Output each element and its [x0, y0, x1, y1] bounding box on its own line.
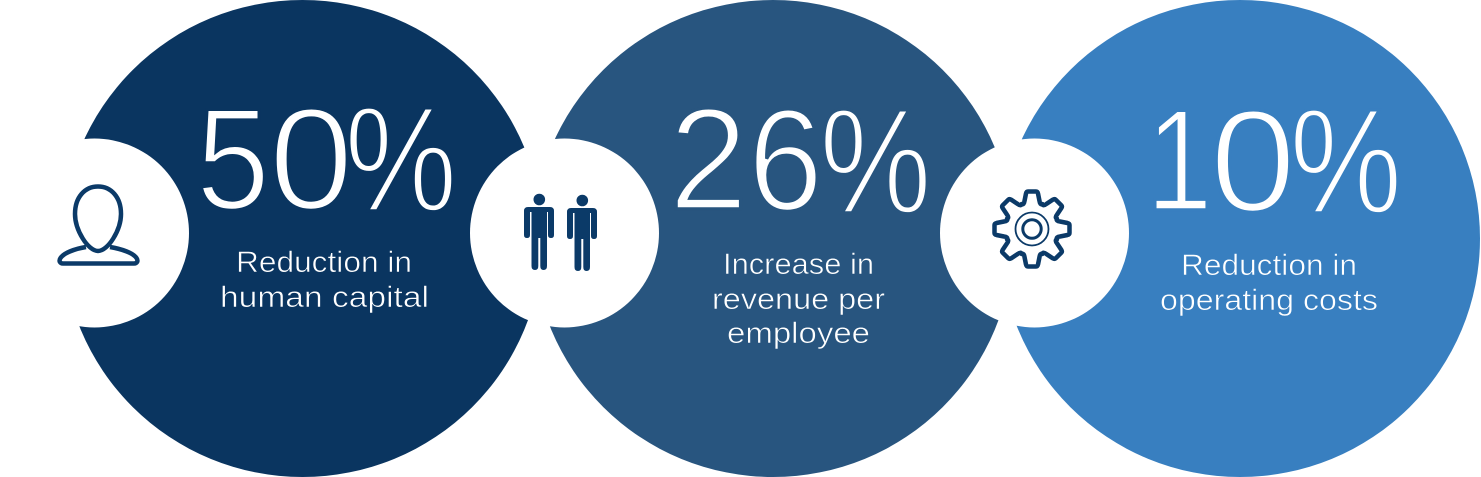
label: Increase in revenue per employee — [712, 248, 885, 350]
panel: 26% increase in revenue per employee — [533, 0, 1013, 477]
circle: bright blue panel — [1000, 0, 1480, 477]
badge: person icon — [0, 138, 189, 328]
label: Increase in revenue per employee: Increase in — [723, 248, 874, 281]
panel: 50% reduction in human capital — [62, 0, 542, 477]
stat: 10%: 1 — [1146, 79, 1213, 241]
stat: 10% — [1146, 77, 1402, 245]
icon: gear — [994, 192, 1070, 266]
badge: gear icon — [940, 138, 1129, 328]
label: Increase in revenue per employee: employee — [727, 317, 870, 350]
stat: 26%: 6 — [748, 79, 823, 241]
stat: 50%: 5 — [196, 78, 270, 240]
stat: 26%: % — [820, 77, 932, 245]
stat: 50% — [196, 75, 457, 243]
stat: 10%: 0 — [1210, 80, 1296, 242]
stat: 26% — [669, 77, 932, 245]
icon: two standing figures — [524, 194, 597, 271]
stat: 26%: 2 — [669, 78, 748, 240]
label: Reduction in operating costs — [1160, 249, 1378, 317]
stat: 10%: % — [1290, 77, 1402, 245]
label: Reduction in human capital: human capital — [220, 281, 429, 314]
circle: dark navy panel — [62, 0, 542, 477]
icon: person outline — [60, 186, 137, 264]
label: Reduction in human capital — [220, 246, 429, 314]
badge: people icon — [470, 138, 659, 328]
stat: 50%: % — [344, 75, 457, 243]
stat: 50%: 0 — [269, 78, 353, 240]
label: Reduction in operating costs: Reduction in — [1181, 249, 1357, 282]
label: Reduction in operating costs: operating costs — [1160, 284, 1378, 317]
circle: mid blue panel — [533, 0, 1013, 477]
panel: 10% reduction in operating costs — [1000, 0, 1480, 477]
label: Increase in revenue per employee: revenue per — [712, 283, 885, 316]
label: Reduction in human capital: Reduction in — [236, 246, 412, 279]
